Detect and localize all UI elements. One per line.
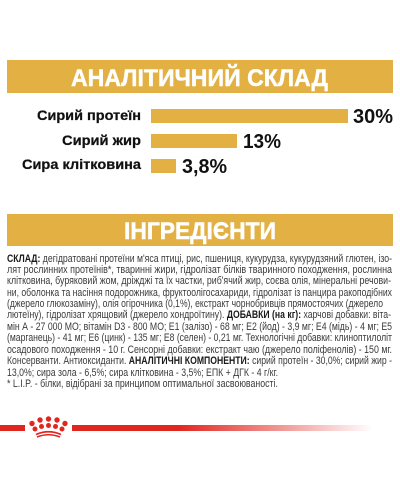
heading band: ingredients: ІНГРЕДІЄНТИ	[124, 218, 276, 245]
text block: ingredient list: * L.I.P. - білки, відібрані за принципом оптимальної засвоюваності.	[7, 378, 278, 390]
bar row: crude fat	[62, 131, 281, 153]
bar row: crude fibre	[22, 156, 227, 178]
icon: crown logo	[29, 416, 68, 437]
text block: ingredient list: 13,0%; сира зола - 6,5%; сира клітковина - 3,5%; ЕПК + ДГК - 4 г/кг.	[7, 367, 278, 379]
heading band: analytical composition: АНАЛІТИЧНИЙ СКЛАД	[71, 64, 329, 92]
bar row: crude fibre: 3,8%	[182, 156, 227, 178]
heading band: ingredients	[7, 214, 393, 246]
bar row: crude protein	[37, 106, 393, 128]
text block: ingredient list	[7, 253, 393, 390]
bar row: crude fibre: Сира клітковина	[22, 156, 141, 172]
panel: analytical composition	[7, 60, 393, 178]
brand band: red line with crown logo	[0, 416, 373, 437]
heading band: analytical composition	[7, 60, 393, 93]
bar row: crude fat: 13%	[243, 131, 281, 153]
bar row: crude protein: Сирий протеїн	[37, 107, 141, 123]
bar row: crude fat: Сирий жир	[62, 132, 141, 148]
bar row: crude protein: 30%	[353, 106, 393, 128]
